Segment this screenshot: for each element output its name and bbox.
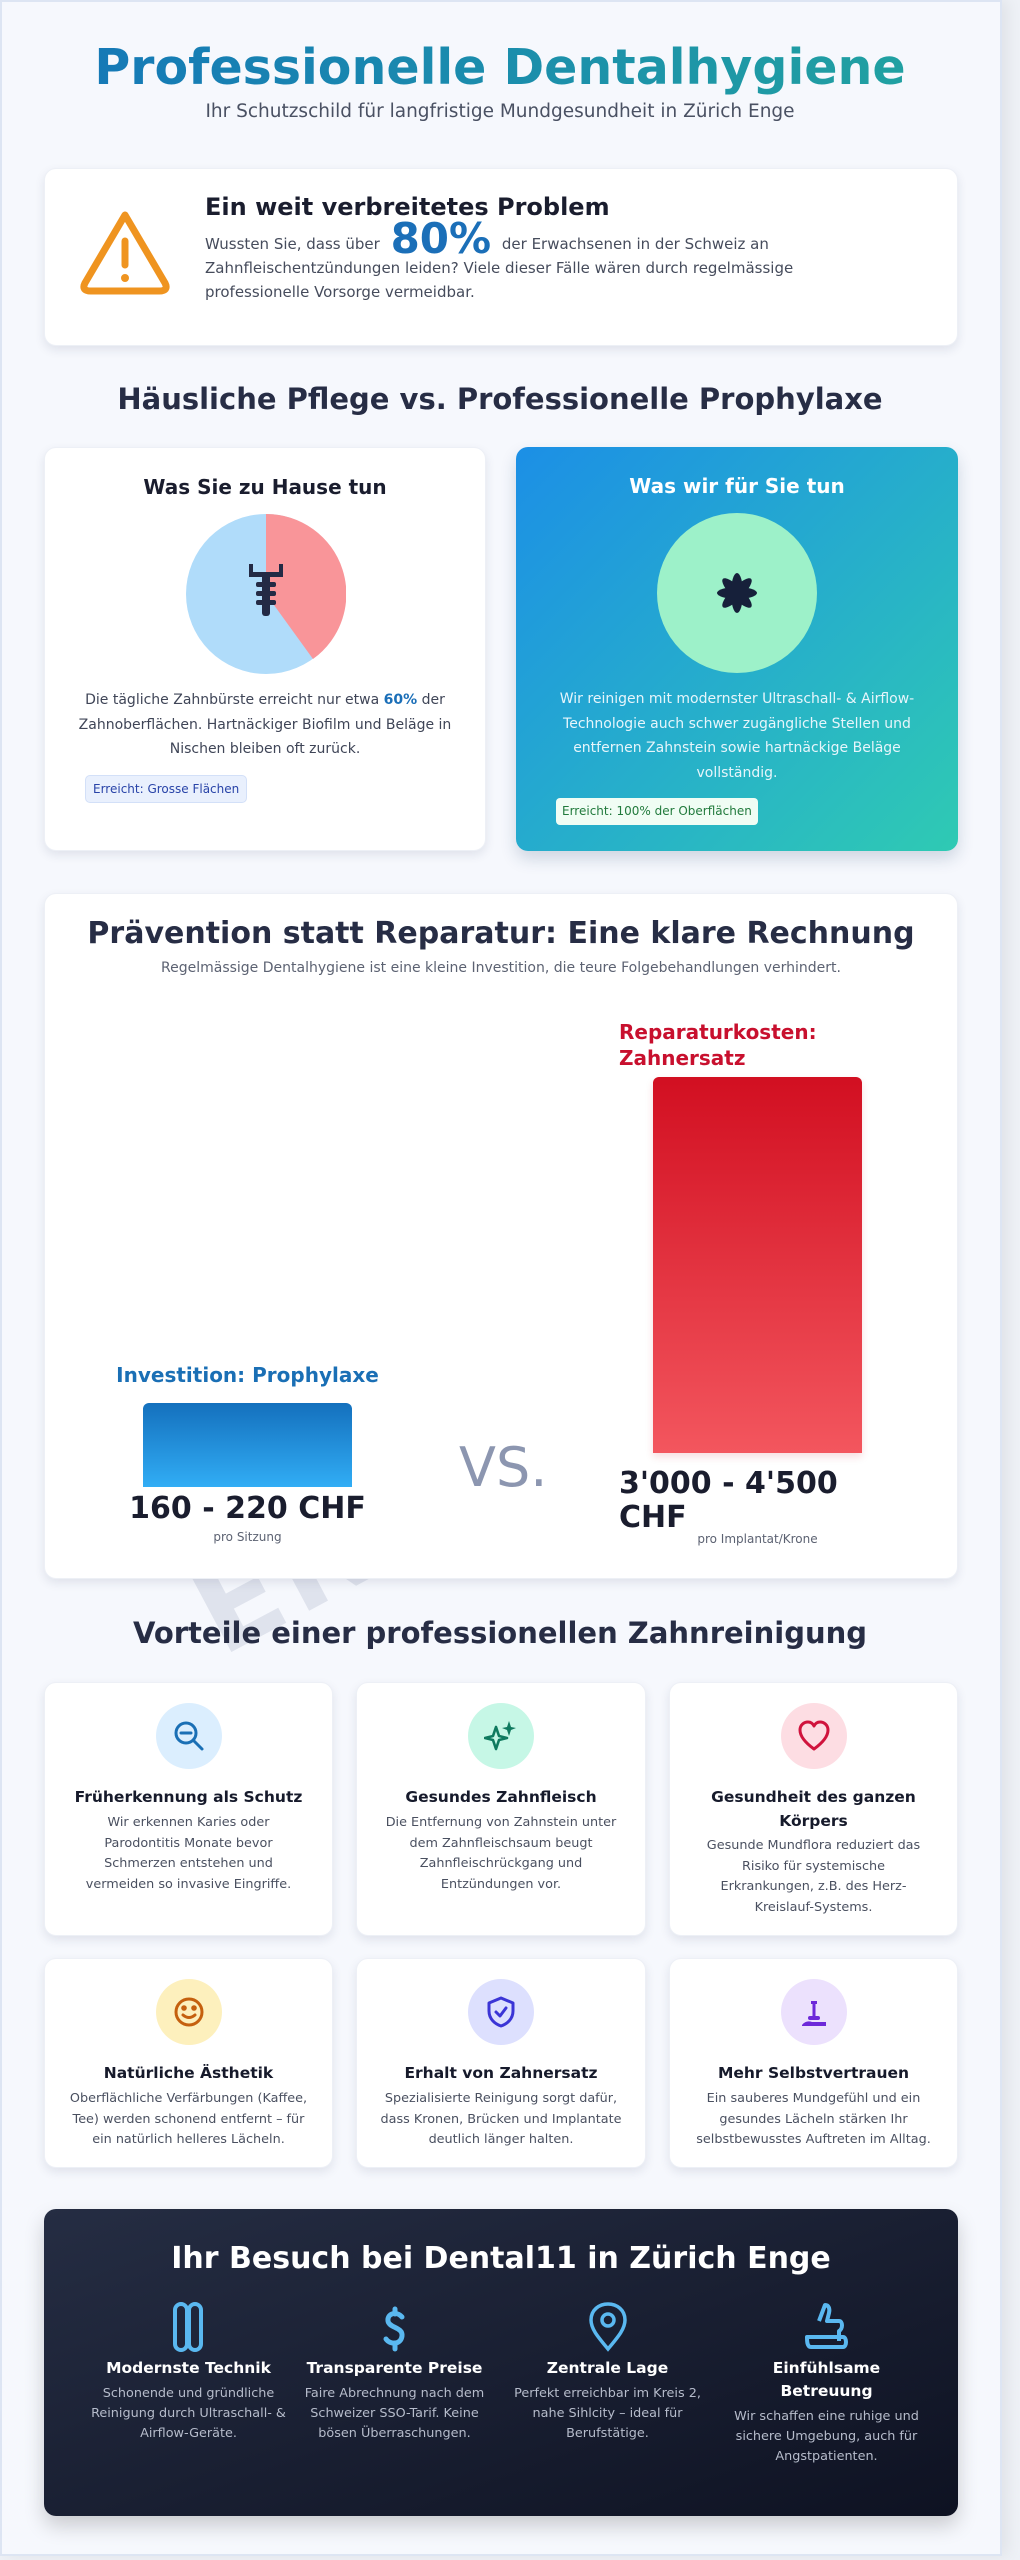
- panel: at home: [44, 447, 486, 851]
- pie chart: [186, 514, 346, 674]
- feature: betreuung: [734, 2303, 919, 2464]
- bar: repair: 3'000 - 4'500: [619, 1466, 838, 1501]
- watermark: ENT: [170, 1427, 484, 1683]
- bar: prophylaxe: [116, 1363, 379, 1544]
- badge: Erreicht: 100% der Oberflächen: [562, 804, 752, 818]
- feature: lage: Perfekt erreichbar im Kreis 2, nahe Sihlcity – ideal für Berufstätige.: [514, 2386, 701, 2441]
- benefit: dentures: Erhalt von Zahnersatz: [404, 2064, 598, 2082]
- subheading: Regelmässige Dentalhygiene ist eine kleine Investition, die teure Folgebehandlungen verhindert.: [161, 960, 841, 976]
- icon: person: [780, 1979, 846, 2045]
- icon: smile: [156, 1979, 222, 2045]
- bar: prophylaxe: Investition: Prophylaxe: [116, 1363, 379, 1387]
- title: Professionelle Dentalhygiene: [94, 39, 906, 96]
- badge: Erreicht: Grosse Flächen: [93, 782, 239, 796]
- benefit: aesthetics: Natürliche Ästhetik: [104, 2064, 273, 2082]
- description: Wir reinigen mit modernster Ultraschall- & Airflow-Technologie auch schwer zugängliche Stellen und entfernen Zahnstein sowie hartnäckige Beläge vollständig.: [560, 691, 914, 780]
- icon: warning: [80, 212, 170, 294]
- feature: preise: Faire Abrechnung nach dem Schweizer SSO-Tarif. Keine bösen Überraschungen.: [305, 2386, 484, 2441]
- panel: cost comparison: [44, 893, 958, 1579]
- benefit: aesthetics: [44, 1958, 333, 2168]
- panel: professional: [516, 447, 958, 851]
- heading: Was wir für Sie tun: [629, 474, 845, 498]
- panel: visit: [44, 2209, 958, 2516]
- bar: repair: [619, 1020, 865, 1546]
- benefit: body: Gesunde Mundflora reduziert das Risiko für systemische Erkrankungen, z.B. des Herz-Kreislauf-Systems.: [707, 1838, 920, 1914]
- benefit: early detection: Früherkennung als Schutz: [75, 1788, 302, 1806]
- icon: shield: [468, 1979, 534, 2045]
- feature: technik: [91, 2302, 286, 2441]
- heading: benefits: Vorteile einer professionellen Zahnreinigung: [133, 1616, 867, 1650]
- icon: clean circle: [657, 513, 817, 673]
- benefit: aesthetics: Oberflächliche Verfärbungen (Kaffee, Tee) werden schonend entfernt – für ein natürlich helleres Lächeln.: [70, 2091, 307, 2147]
- benefit: dentures: Spezialisierte Reinigung sorgt dafür, dass Kronen, Brücken und Implantate deutlich länger halten.: [380, 2091, 622, 2147]
- feature: betreuung: Wir schaffen eine ruhige und sichere Umgebung, auch für Angstpatienten.: [734, 2409, 919, 2464]
- benefit: early detection: [44, 1682, 333, 1936]
- problem text: Wussten Sie, dass über 80% der Erwachsenen in der Schweiz an Zahnfleischentzündungen leiden? Viele dieser Fälle wären durch regelmässige professionelle Vorsorge vermeidbar.: [205, 214, 793, 301]
- problem text: Ein weit verbreitetes Problem: [205, 193, 610, 221]
- benefit: confidence: Ein sauberes Mundgefühl und ein gesundes Lächeln stärken Ihr selbstbewusstes Auftreten im Alltag.: [696, 2091, 931, 2147]
- benefit: body: [669, 1682, 958, 1936]
- icon: heart: [780, 1703, 846, 1769]
- feature: technik: Modernste Technik: [106, 2359, 271, 2377]
- bar: repair: Reparaturkosten:: [619, 1020, 817, 1044]
- benefit: dentures: [356, 1958, 646, 2168]
- feature: preise: [305, 2306, 484, 2441]
- bar: repair: CHF: [619, 1500, 687, 1535]
- badge: [556, 798, 758, 825]
- benefit: confidence: Mehr Selbstvertrauen: [718, 2064, 909, 2082]
- subtitle: Ihr Schutzschild für langfristige Mundgesundheit in Zürich Enge: [205, 101, 795, 122]
- bar: prophylaxe: pro Sitzung: [213, 1530, 282, 1544]
- feature: betreuung: Einfühlsame Betreuung: [773, 2359, 880, 2400]
- bar: repair: pro Implantat/Krone: [697, 1532, 818, 1546]
- benefit: early detection: Wir erkennen Karies oder Parodontitis Monate bevor Schmerzen entstehen und vermeiden so invasive Eingriffe.: [86, 1815, 291, 1892]
- heading: Was Sie zu Hause tun: [143, 475, 387, 499]
- vs: VS.: [459, 1436, 547, 1499]
- benefit: body: Gesundheit des ganzen Körpers: [711, 1788, 916, 1830]
- benefit: gums: [356, 1682, 646, 1936]
- bar: prophylaxe: 160 - 220 CHF: [129, 1491, 366, 1526]
- heading: Ihr Besuch bei Dental11 in Zürich Enge: [171, 2241, 831, 2276]
- feature: preise: Transparente Preise: [307, 2359, 482, 2377]
- heading: comparison: Häusliche Pflege vs. Professionelle Prophylaxe: [117, 382, 883, 416]
- icon: sparkles: [468, 1703, 534, 1769]
- icon: search: [156, 1703, 222, 1769]
- bar: repair: Zahnersatz: [619, 1046, 746, 1070]
- badge: [85, 775, 247, 803]
- benefit: confidence: [669, 1958, 958, 2168]
- feature: lage: [514, 2302, 701, 2441]
- feature: lage: Zentrale Lage: [547, 2359, 668, 2377]
- description: Die tägliche Zahnbürste erreicht nur etwa 60% der Zahnoberflächen. Hartnäckiger Biofilm und Beläge in Nischen bleiben oft zurück.: [79, 692, 451, 757]
- benefit: gums: Gesundes Zahnfleisch: [405, 1788, 597, 1806]
- feature: technik: Schonende und gründliche Reinigung durch Ultraschall- & Airflow-Geräte.: [91, 2386, 286, 2441]
- panel: problem: [44, 168, 958, 346]
- benefit: gums: Die Entfernung von Zahnstein unter dem Zahnfleischsaum beugt Zahnfleischrückgang und Entzündungen vor.: [386, 1815, 616, 1892]
- heading: Prävention statt Reparatur: Eine klare Rechnung: [87, 916, 915, 951]
